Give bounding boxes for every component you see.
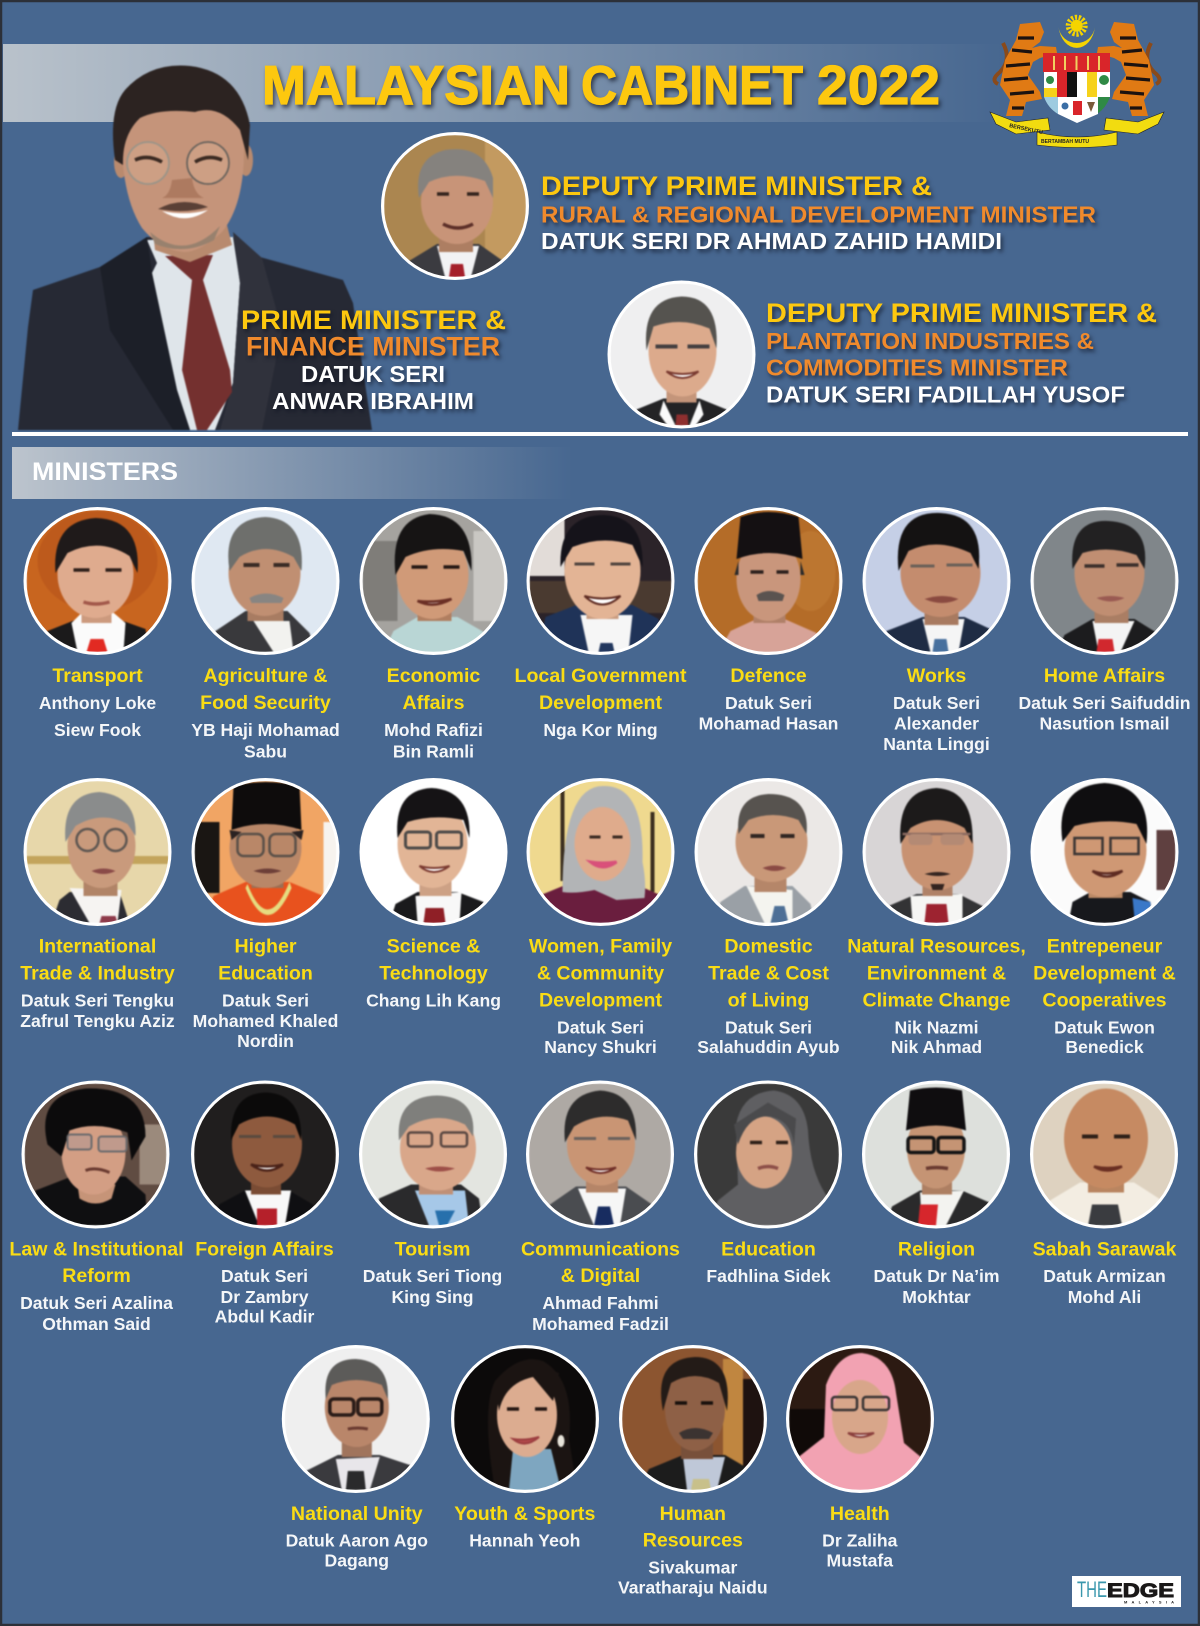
portrait: Nik Nazmi (862, 778, 1010, 926)
label: Religion: Religion (898, 1238, 975, 1260)
portrait: Armizan Mohd Ali (1030, 1080, 1178, 1228)
name: Ahmad Fahmi Mohamed Fadzil: Ahmad Fahmi (542, 1293, 659, 1313)
name: Armizan Mohd Ali: Datuk Armizan (1043, 1266, 1166, 1286)
portrait: Azalina Othman (22, 1080, 170, 1228)
portrait: Alexander Nanta Linggi (862, 507, 1010, 655)
label: Agriculture: Agriculture & (203, 665, 328, 687)
portrait: Hannah Yeoh (451, 1345, 599, 1493)
name: Tiong King Sing: King Sing (391, 1287, 474, 1307)
text: deputy PM Fadillah: DEPUTY PRIME MINISTER & (766, 298, 1157, 328)
name: Tengku Zafrul: Datuk Seri Tengku (21, 990, 174, 1010)
name: Azalina Othman Said: Datuk Seri Azalina (20, 1293, 173, 1313)
title (262, 54, 940, 116)
name: Nancy Shukri: Datuk Seri (557, 1017, 644, 1037)
label: Economic Affairs: Affairs (402, 692, 465, 714)
label: Defence: Defence (730, 665, 807, 687)
portrait: Nga Kor Ming (526, 507, 674, 655)
name: Zambry Abdul Kadir: Dr Zambry (220, 1287, 309, 1307)
minister: Youth & Sports (451, 1345, 599, 1551)
name: Salahuddin Ayub: Salahuddin Ayub (697, 1037, 840, 1057)
minister: Religion (862, 1080, 1010, 1307)
minister: Higher Education (192, 778, 340, 1051)
portrait: Salahuddin Ayub (694, 778, 842, 926)
name: Aaron Ago Dagang: Dagang (325, 1550, 389, 1570)
label: Home Affairs: Home Affairs (1044, 665, 1165, 687)
text: deputy PM Zahid: DATUK SERI DR AHMAD ZAHID HAMIDI (541, 228, 1002, 254)
title: 2022 (817, 54, 940, 116)
portrait: Khaled Nordin (192, 778, 340, 926)
name: Sivakumar Varatharaju Naidu: Sivakumar (648, 1558, 737, 1578)
label: Economic Affairs: Economic (387, 665, 480, 687)
icon: Malaysian coat of arms: BERSEKUTU (1009, 123, 1043, 136)
ministers banner (12, 447, 572, 499)
name: Anthony Loke Siew Fook: Anthony Loke (39, 693, 156, 713)
name: Chang Lih Kang: Chang Lih Kang (366, 990, 501, 1010)
name: Zaliha Mustafa: Dr Zaliha (822, 1531, 898, 1551)
label: Human Resources: Human (660, 1503, 726, 1525)
label: Domestic Trade & Cost of Living: Trade & Cost (708, 962, 829, 984)
label: Youth & Sports: Youth & Sports (454, 1503, 595, 1525)
icon: Malaysian coat of arms (990, 17, 1164, 148)
label: Tourism: Tourism (395, 1238, 470, 1260)
label: Sabah Sarawak: Sabah Sarawak (1033, 1238, 1176, 1260)
portrait: Nancy Shukri (526, 778, 674, 926)
minister: Domestic Trade (694, 778, 842, 1057)
text: deputy PM Fadillah (766, 298, 1157, 408)
label: Natural Resources, Environment & Climate Change: Natural Resources, (847, 935, 1026, 957)
name: Alexander Nanta Linggi: Nanta Linggi (883, 734, 990, 754)
text: deputy PM Fadillah: PLANTATION INDUSTRIES & (766, 328, 1094, 354)
name: Zambry Abdul Kadir: Datuk Seri (221, 1266, 308, 1286)
label: Entrepreneur Development & Cooperatives: Development & (1033, 962, 1176, 984)
minister: Agriculture (191, 507, 340, 762)
heading: ministers: MINISTERS (32, 458, 178, 486)
minister: Sabah Sarawak (1030, 1080, 1178, 1307)
logo: The Edge Malaysia: THE (1077, 1577, 1107, 1602)
portrait: Zambry Abdul Kadir (191, 1080, 339, 1228)
text: prime minister: PRIME MINISTER & (241, 305, 506, 335)
minister: Education (694, 1080, 842, 1286)
name: Saifuddin Nasution Ismail: Nasution Ismail (1039, 714, 1170, 734)
name: Mohamad Hasan: Mohamad Hasan (699, 714, 838, 734)
portrait: Prime Minister Anwar Ibrahim (18, 66, 372, 430)
label: Women, Family & Community Development: Development (539, 989, 662, 1011)
label: Entrepreneur Development & Cooperatives: Cooperatives (1042, 989, 1167, 1011)
name: Mohamad Hasan: Datuk Seri (725, 693, 812, 713)
label: Education: Education (721, 1238, 816, 1260)
portrait: Rafizi Ramli (360, 507, 508, 655)
label: International Trade & Industry: International (39, 935, 156, 957)
label: Human Resources: Resources (643, 1530, 743, 1552)
label: Entrepreneur Development & Cooperatives: Entrepeneur (1047, 935, 1163, 957)
text: deputy PM Fadillah: DATUK SERI FADILLAH YUSOF (766, 382, 1125, 408)
portrait: Sivakumar Naidu (619, 1345, 767, 1493)
name: Nga Kor Ming: Nga Kor Ming (543, 720, 658, 740)
minister: Tourism (359, 1080, 507, 1307)
portrait: Tiong King Sing (359, 1080, 507, 1228)
text: prime minister: ANWAR IBRAHIM (272, 388, 474, 414)
label: Transport: Transport (52, 665, 143, 687)
label: Science & Technology: Technology (379, 962, 488, 984)
minister: Health (786, 1345, 934, 1570)
title: MALAYSIAN (262, 54, 570, 116)
label: Natural Resources, Environment & Climate Change: Environment & (867, 962, 1006, 984)
portrait: Saifuddin Nasution (1030, 507, 1178, 655)
portrait: Ewon Benedick (1030, 778, 1178, 926)
label: Domestic Trade & Cost of Living: of Living (728, 989, 809, 1011)
minister: Human Resources (618, 1345, 768, 1597)
portrait: Aaron Ago Dagang (282, 1345, 430, 1493)
name: Salahuddin Ayub: Datuk Seri (725, 1017, 812, 1037)
label: Law & Institutional Reform: Law & Institutional (9, 1238, 184, 1260)
icon: Malaysian coat of arms: BERTAMBAH MUTU (1041, 139, 1089, 145)
portrait: Tengku Zafrul (24, 778, 172, 926)
text: prime minister (241, 305, 506, 414)
portrait: Anthony Loke (24, 507, 172, 655)
name: Armizan Mohd Ali: Mohd Ali (1068, 1287, 1141, 1307)
text: deputy PM Zahid: DEPUTY PRIME MINISTER & (541, 171, 932, 201)
minister: National Unity (282, 1345, 430, 1570)
minister: Defence (694, 507, 842, 734)
name: Hannah Yeoh: Hannah Yeoh (469, 1531, 580, 1551)
portrait: Ahmad Zahid Hamidi (381, 132, 529, 280)
name: Ewon Benedick: Benedick (1065, 1037, 1144, 1057)
logo: The Edge Malaysia: EDGE (1107, 1580, 1174, 1602)
minister: Economic Affairs (360, 507, 508, 762)
minister: Entrepreneur Development (1030, 778, 1178, 1057)
text: prime minister: DATUK SERI (301, 361, 445, 387)
label: Communications & Digital: Communications (521, 1238, 680, 1260)
name: Nik Nazmi Nik Ahmad: Nik Nazmi (894, 1017, 979, 1037)
text: deputy PM Fadillah: COMMODITIES MINISTER (766, 355, 1068, 381)
label: Local Government Development: Development (539, 692, 662, 714)
minister: Law & Institutional Reform (9, 1080, 184, 1334)
text: prime minister: FINANCE MINISTER (246, 332, 500, 362)
text: deputy PM Zahid (541, 171, 1096, 254)
label: Health: Health (830, 1503, 890, 1525)
name: Mohamed Khaled Nordin: Nordin (237, 1031, 294, 1051)
portrait: Mohamad Sabu (192, 507, 340, 655)
name: Ahmad Fahmi Mohamed Fadzil: Mohamed Fadzil (532, 1314, 669, 1334)
title banner (3, 44, 1003, 122)
name: Alexander Nanta Linggi: Datuk Seri (893, 693, 980, 713)
label: Natural Resources, Environment & Climate Change: Climate Change (862, 989, 1011, 1011)
label: Communications & Digital: & Digital (561, 1265, 640, 1287)
title: CABINET (581, 54, 803, 116)
name: Zaliha Mustafa: Mustafa (827, 1550, 893, 1570)
minister: Women, Family & Community (526, 778, 674, 1057)
name: Fadhlina Sidek: Fadhlina Sidek (706, 1266, 831, 1286)
label: National Unity: National Unity (291, 1503, 423, 1525)
label: Local Government Development: Local Government (514, 665, 687, 687)
minister: Home Affairs (1018, 507, 1191, 734)
logo: The Edge Malaysia (1072, 1576, 1181, 1607)
name: Na'im Mokhtar: Mokhtar (902, 1287, 971, 1307)
minister: Communications & Digital (521, 1080, 680, 1334)
label: Law & Institutional Reform: Reform (62, 1265, 131, 1287)
portrait: Fahmi Fadzil (526, 1080, 674, 1228)
minister: Foreign Affairs (191, 1080, 339, 1327)
minister: Works (862, 507, 1010, 754)
portrait: Fadhlina Sidek (694, 1080, 842, 1228)
label: Foreign Affairs: Foreign Affairs (195, 1238, 334, 1260)
name: Mohamed Khaled Nordin: Mohamed Khaled (193, 1011, 338, 1031)
label: Works: Works (907, 665, 966, 687)
name: Mohamad Sabu: Sabu (244, 742, 287, 762)
name: Tengku Zafrul: Zafrul Tengku Aziz (20, 1011, 175, 1031)
minister: International Trade (20, 778, 175, 1031)
name: Aaron Ago Dagang: Datuk Aaron Ago (286, 1531, 428, 1551)
minister: Natural Resources (847, 778, 1026, 1057)
label: International Trade & Industry: Trade & Industry (20, 962, 175, 984)
label: Domestic Trade & Cost of Living: Domestic (724, 935, 813, 957)
portrait: Chang Lih Kang (360, 778, 508, 926)
label: Science & Technology: Science & (387, 935, 480, 957)
label: Women, Family & Community Development: Women, Family (529, 935, 672, 957)
portrait: Mohamad Hasan (694, 507, 842, 655)
name: Saifuddin Nasution Ismail: Datuk Seri Saifuddin (1018, 693, 1191, 713)
label: Agriculture: Food Security (200, 692, 331, 714)
name: Mohamed Khaled Nordin: Datuk Seri (222, 990, 309, 1010)
name: Azalina Othman Said: Othman Said (42, 1314, 151, 1334)
name: Mohd Rafizi Bin Ramli: Mohd Rafizi (384, 720, 483, 740)
label: Higher Education: Higher (234, 935, 297, 957)
name: Mohd Rafizi Bin Ramli: Bin Ramli (393, 742, 474, 762)
label: Higher Education: Education (218, 962, 313, 984)
text: deputy PM Zahid: RURAL & REGIONAL DEVELOPMENT MINISTER (541, 202, 1096, 228)
name: Alexander Nanta Linggi: Alexander (894, 714, 979, 734)
portrait: Na'im Mokhtar (862, 1080, 1010, 1228)
portrait: Fadillah Yusof (608, 280, 756, 428)
name: Ewon Benedick: Datuk Ewon (1054, 1017, 1155, 1037)
label: Women, Family & Community Development: & Community (537, 962, 664, 984)
name: Sivakumar Varatharaju Naidu: Varatharaju Naidu (618, 1577, 768, 1597)
logo: The Edge Malaysia: MALAYSIA (1124, 1600, 1174, 1604)
name: Nancy Shukri: Nancy Shukri (544, 1037, 657, 1057)
name: Zambry Abdul Kadir: Abdul Kadir (215, 1307, 314, 1327)
portrait: Zaliha Mustafa (786, 1345, 934, 1493)
name: Nik Nazmi Nik Ahmad: Nik Ahmad (891, 1037, 982, 1057)
minister: Local Government (514, 507, 687, 740)
name: Na'im Mokhtar: Datuk Dr Na’im (873, 1266, 1000, 1286)
name: Anthony Loke Siew Fook: Siew Fook (54, 720, 141, 740)
minister: Transport (24, 507, 172, 740)
name: Tiong King Sing: Datuk Seri Tiong (363, 1266, 502, 1286)
minister: Science & Technology (360, 778, 508, 1010)
name: Mohamad Sabu: YB Haji Mohamad (191, 720, 340, 740)
